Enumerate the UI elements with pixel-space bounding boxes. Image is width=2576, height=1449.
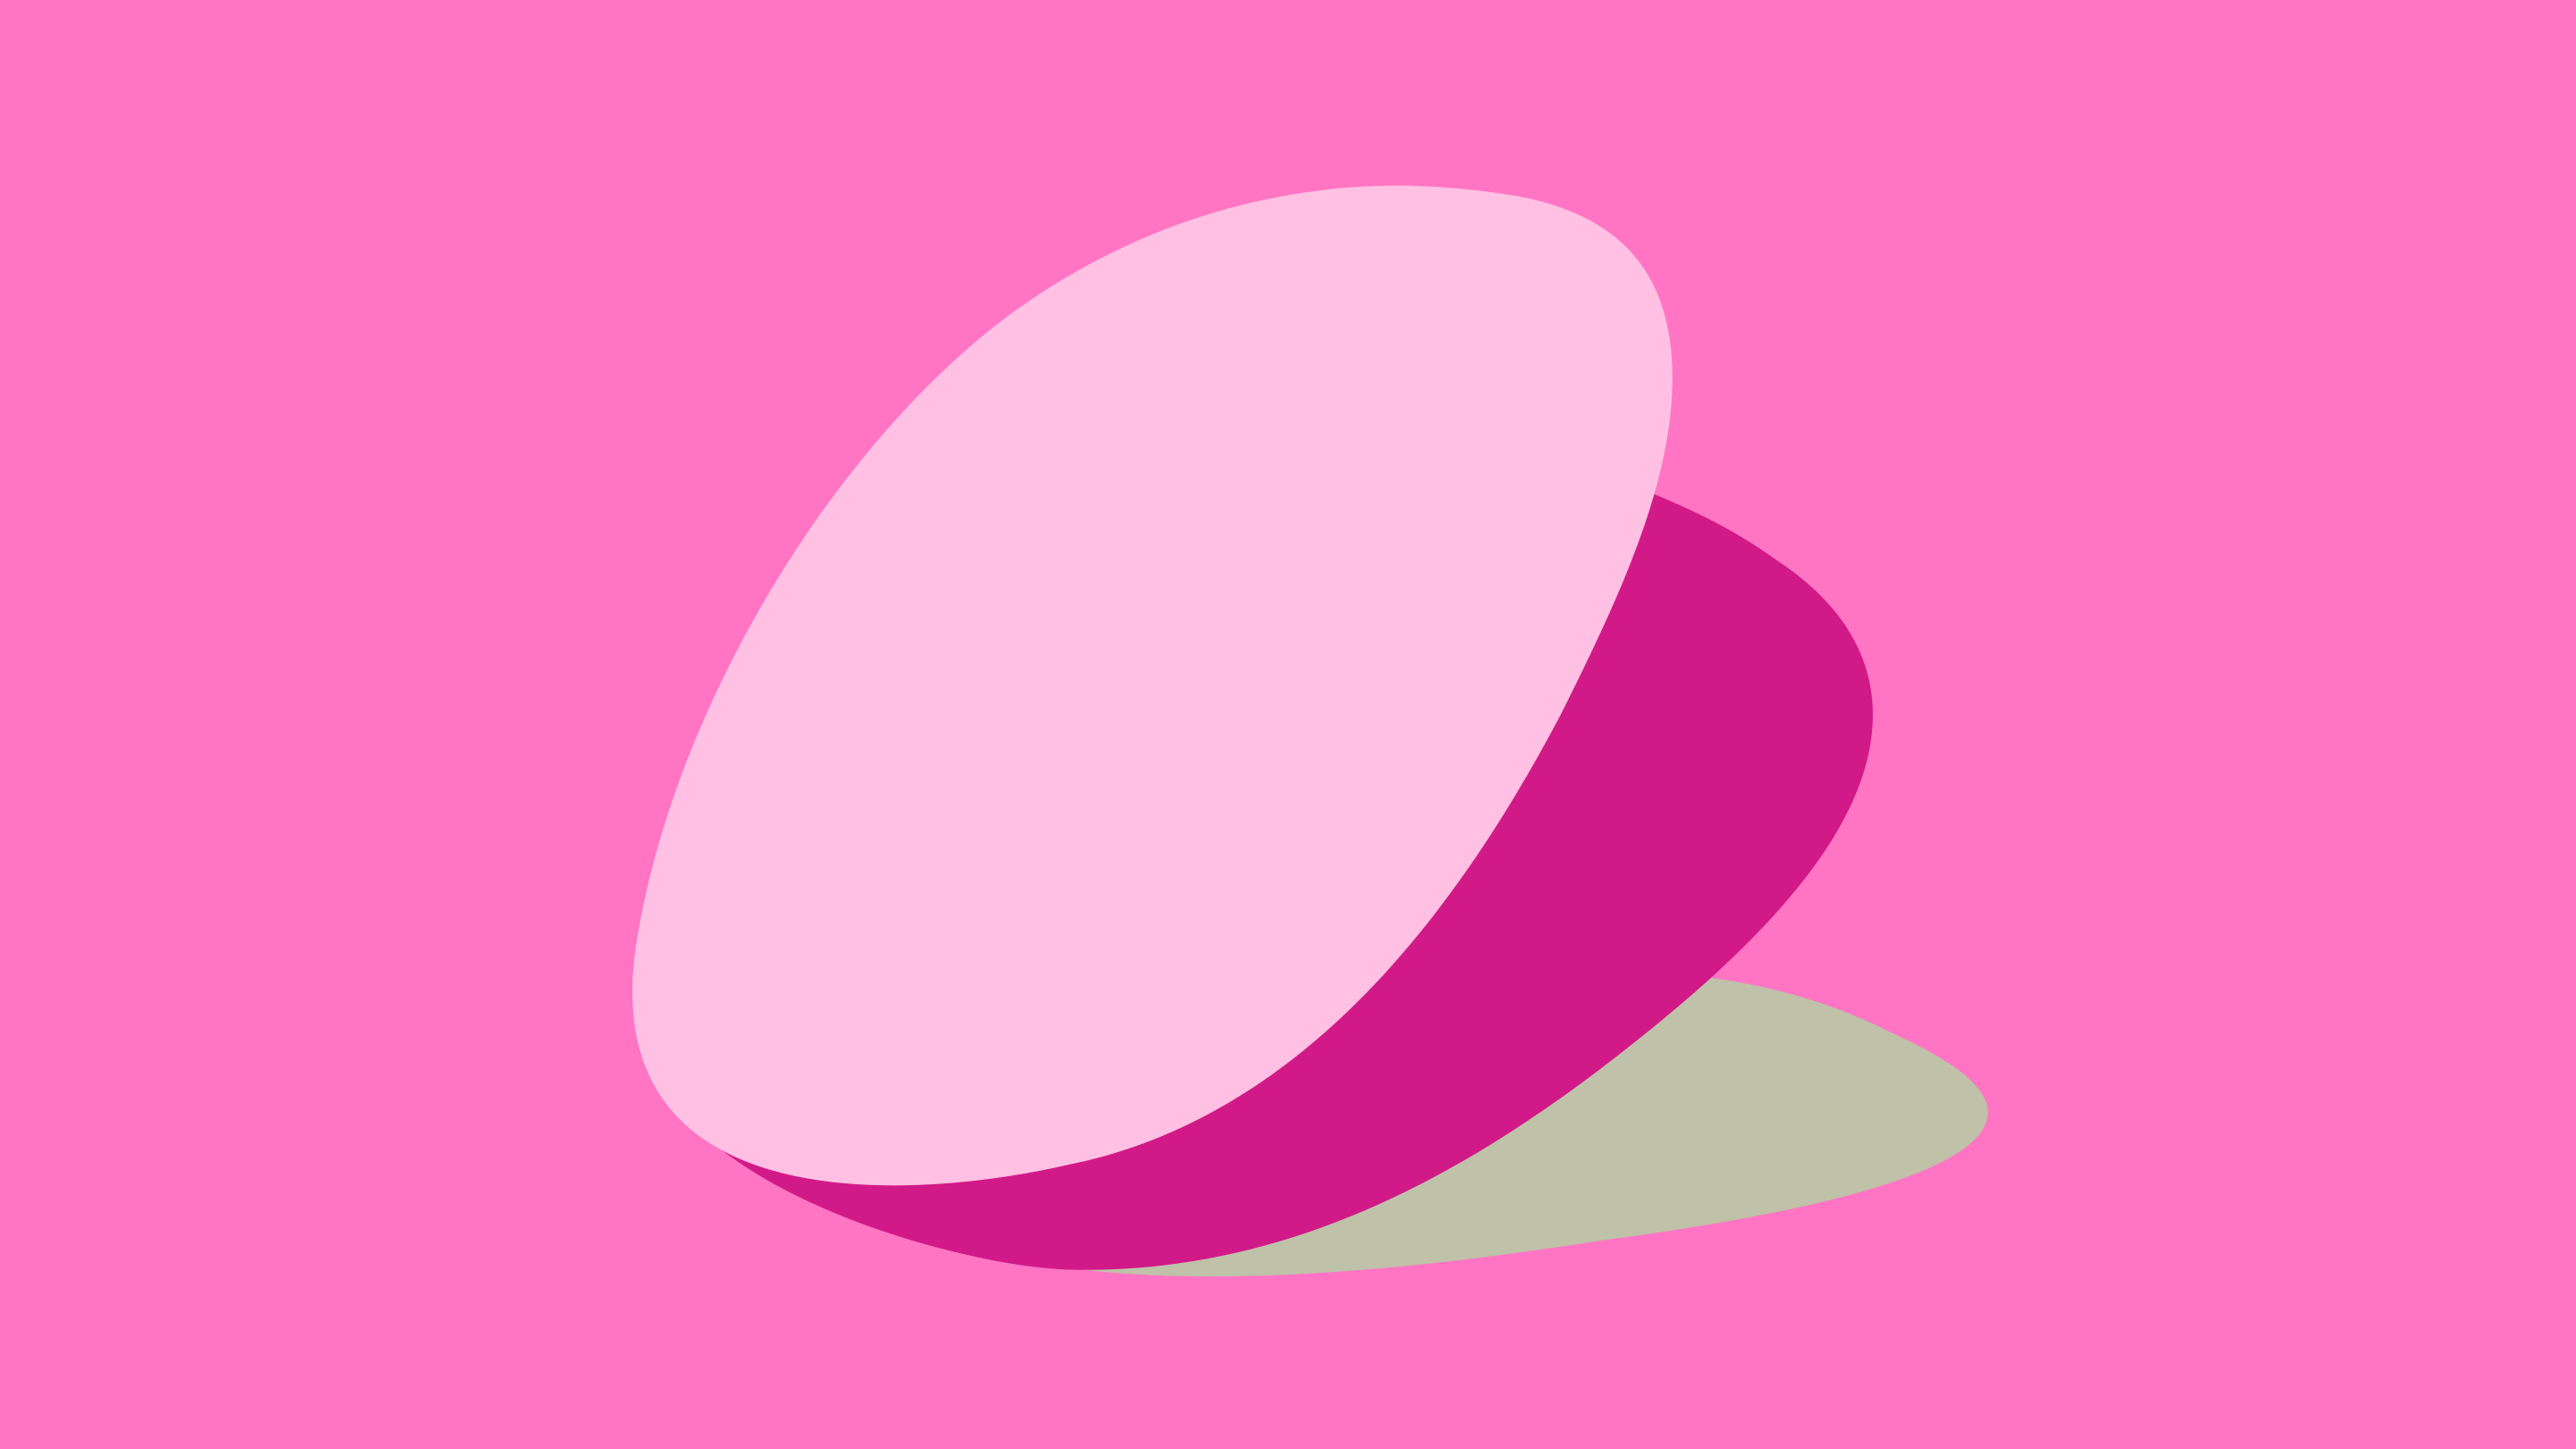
shape: light pink blob [632,186,1673,1185]
shape: magenta blob [719,493,1873,1270]
shape: khaki blob [1084,978,1987,1276]
